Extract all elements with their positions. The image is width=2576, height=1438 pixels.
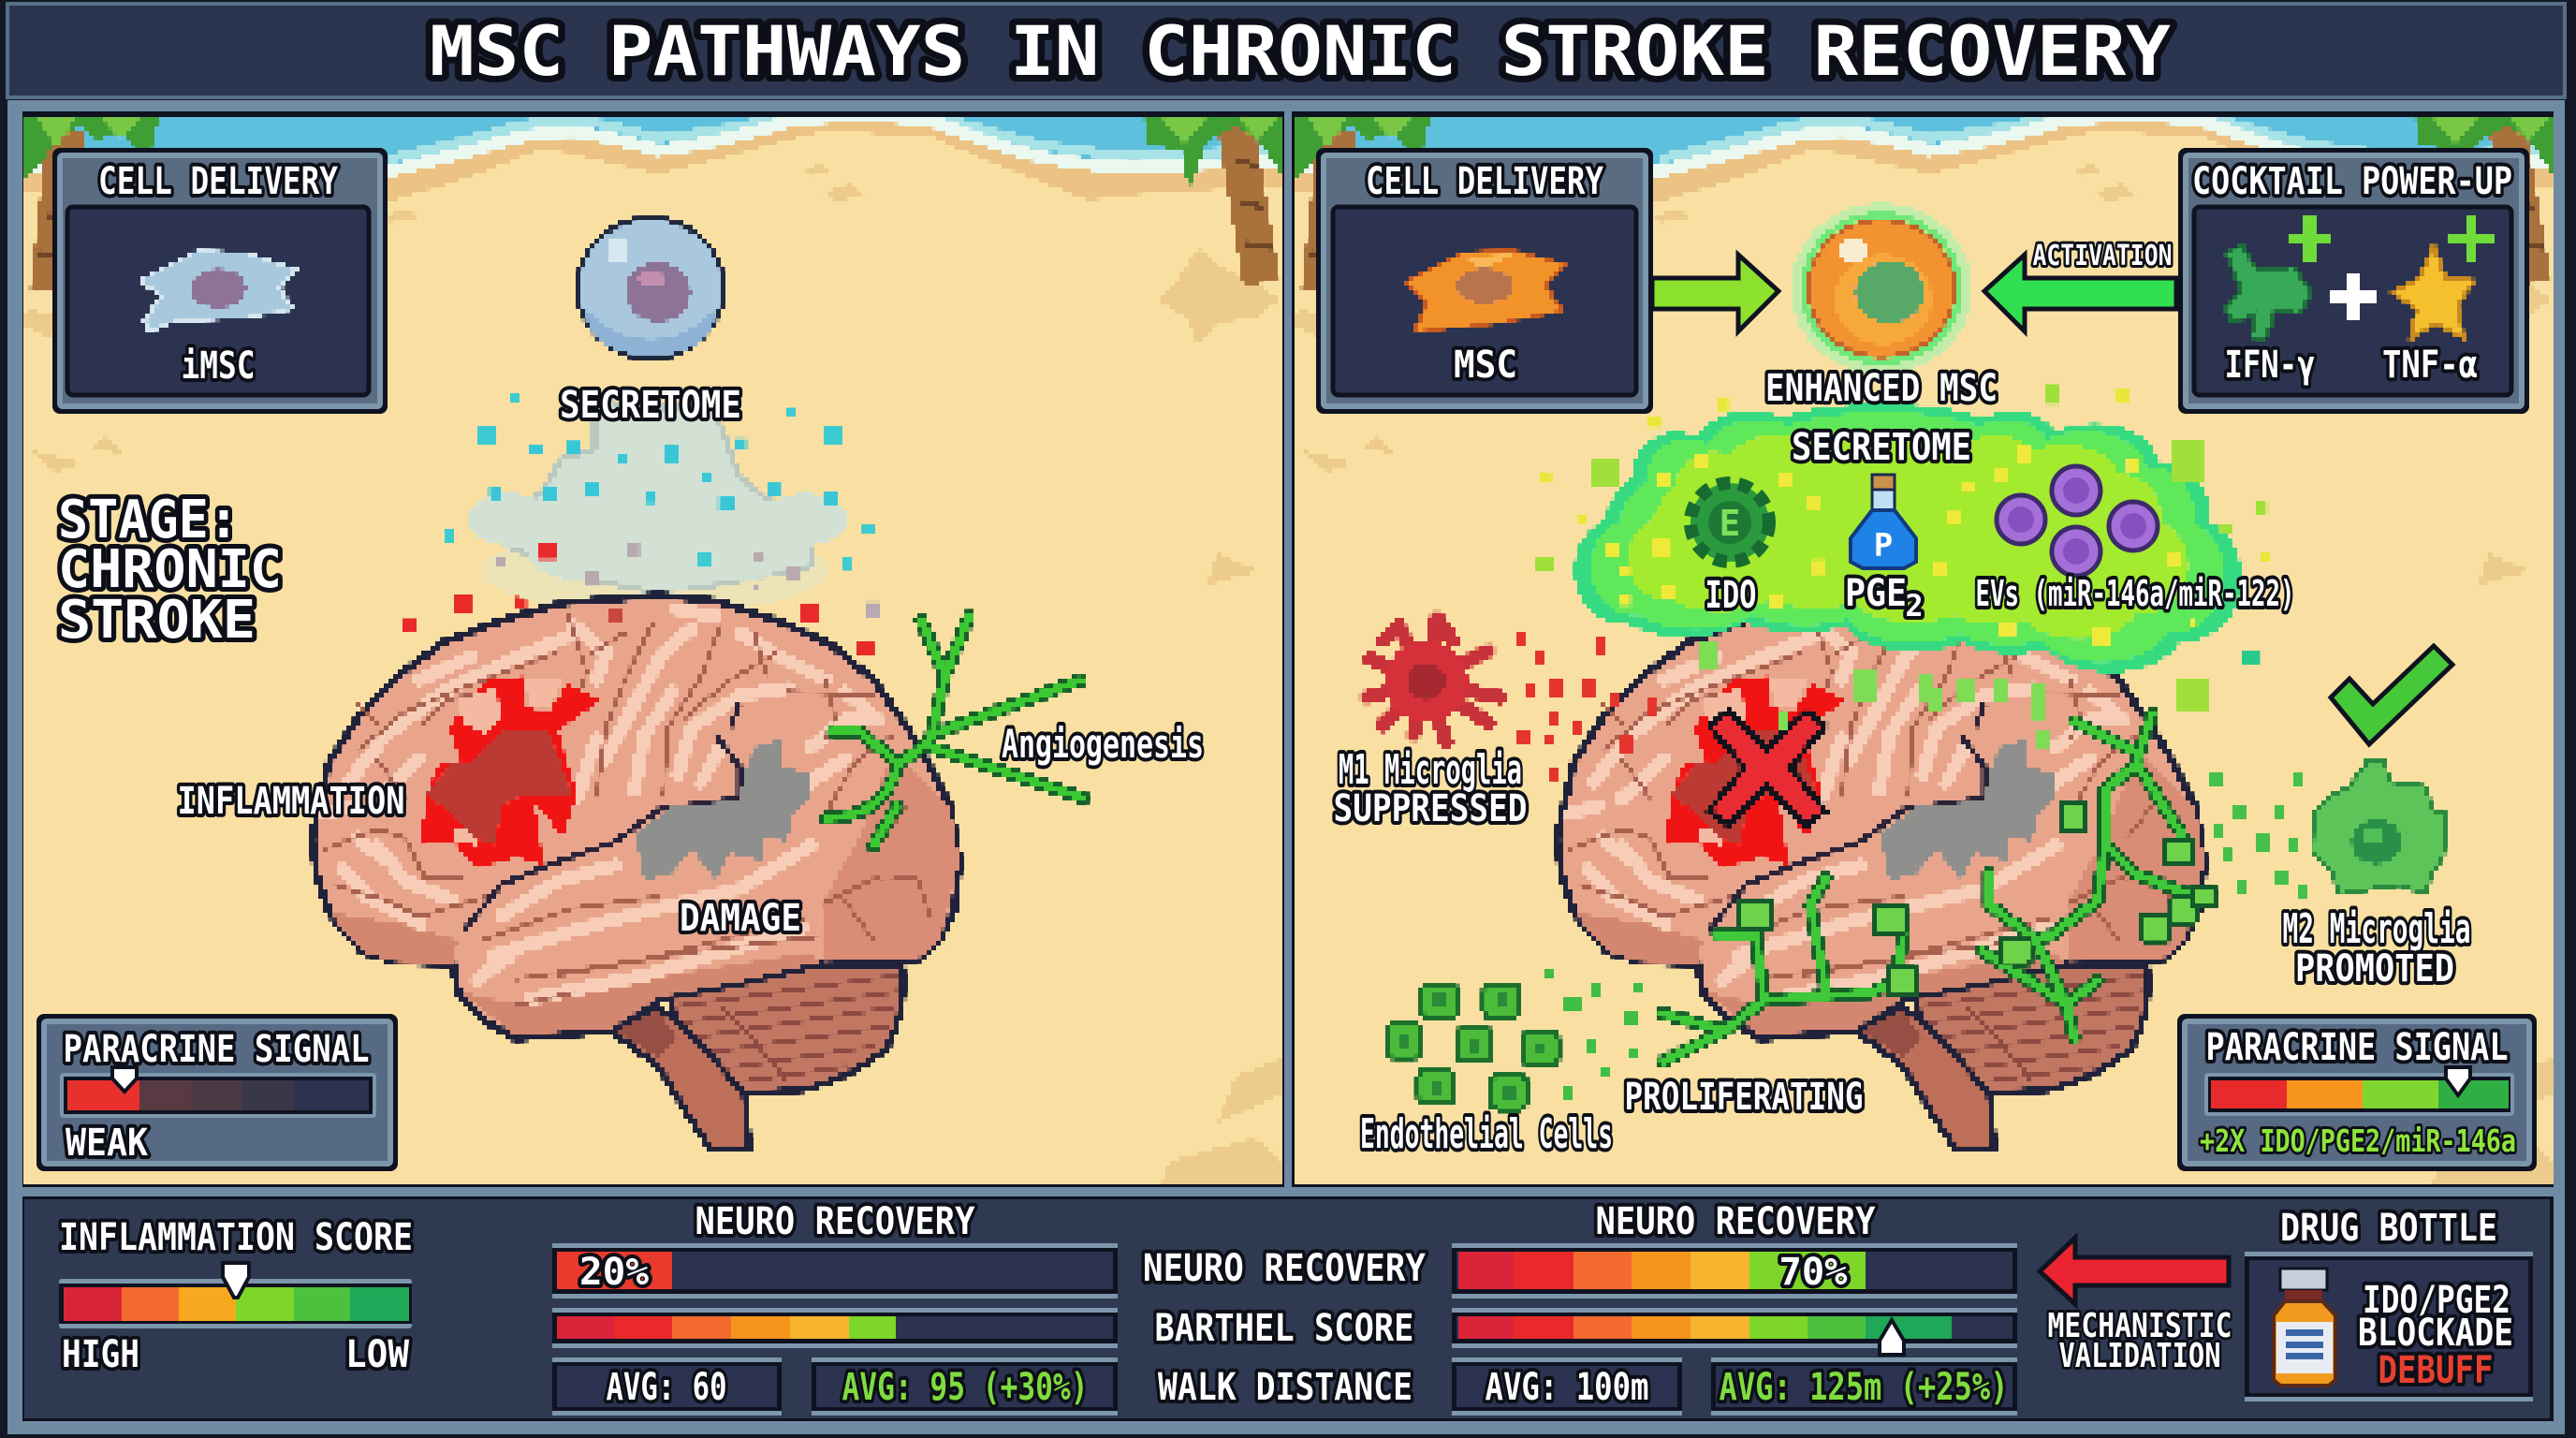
card: paracrine signal enhanced bbox=[2177, 1014, 2537, 1171]
icon: M1 microglia bbox=[1367, 618, 1500, 741]
angiogenesis vessel bbox=[826, 617, 1084, 845]
icon: check mark bbox=[2331, 646, 2452, 744]
marker bbox=[112, 1067, 137, 1092]
center metric labels: WALK DISTANCE bbox=[1158, 1366, 1412, 1409]
card: cell delivery MSC: MSC bbox=[1454, 344, 1517, 387]
marker bbox=[1880, 1320, 1904, 1355]
drug bottle: BLOCKADE bbox=[2358, 1312, 2513, 1355]
label: activation: ACTIVATION bbox=[2033, 240, 2172, 272]
card: paracrine signal weak bbox=[37, 1014, 398, 1171]
drug bottle: DEBUFF bbox=[2378, 1349, 2494, 1392]
card: cocktail power-up bbox=[2178, 148, 2529, 414]
center metric labels bbox=[1143, 1247, 1426, 1409]
particles to brain bbox=[1699, 641, 2050, 749]
card: cell delivery iMSC: iMSC bbox=[182, 345, 255, 388]
label: secretome: SECRETOME bbox=[560, 384, 741, 427]
icon: TNF-alpha bbox=[2393, 217, 2494, 339]
bar: neuro recovery 70%: 70% bbox=[1778, 1251, 1848, 1294]
card: cocktail power-up: TNF-α bbox=[2382, 344, 2478, 387]
label: stage chronic stroke: STROKE bbox=[58, 590, 256, 651]
icon: PGE2 potion: P bbox=[1874, 527, 1893, 565]
arrow: MSC to enhanced MSC bbox=[1652, 255, 1778, 331]
bar: neuro recovery 20% bbox=[552, 1243, 1118, 1299]
particles: M2 bbox=[2209, 772, 2307, 898]
bar: neuro recovery 20%: 20% bbox=[579, 1251, 649, 1294]
icon: bottle bbox=[2274, 1269, 2335, 1386]
icon: iMSC cell bbox=[140, 251, 297, 332]
label: PGE2: PGE bbox=[1845, 572, 1907, 615]
label: endothelial cells: Endothelial Cells bbox=[1360, 1110, 1613, 1158]
damage zone bbox=[1880, 739, 2056, 881]
drug bottle: DRUG BOTTLE bbox=[2280, 1207, 2497, 1250]
arrow: activation bbox=[1984, 255, 2176, 331]
marker bbox=[2446, 1067, 2470, 1095]
label: M1 microglia: M1 Microglia bbox=[1339, 746, 1522, 794]
card: cell delivery MSC bbox=[1316, 148, 1653, 414]
icon: IDO gear bbox=[1690, 483, 1769, 562]
label: secretome enhanced: SECRETOME bbox=[1792, 426, 1971, 469]
green secretome cloud bbox=[1536, 386, 2270, 712]
center metric labels: BARTHEL SCORE bbox=[1155, 1307, 1413, 1350]
bar: neuro recovery 70% bbox=[1452, 1243, 2017, 1299]
panel: enhanced MSC, right bbox=[1290, 116, 2552, 1182]
icon: endothelial cells bbox=[1386, 969, 1645, 1109]
reduced inflammation zone bbox=[1664, 676, 1846, 869]
label: inflammation: INFLAMMATION bbox=[178, 780, 404, 823]
card: cocktail power-up: COCKTAIL POWER-UP bbox=[2192, 160, 2512, 203]
label: angiogenesis: Angiogenesis bbox=[1002, 721, 1204, 767]
card: cell delivery iMSC: CELL DELIVERY bbox=[98, 160, 338, 203]
card: paracrine signal weak: WEAK bbox=[66, 1122, 148, 1165]
label: M2 microglia bbox=[2282, 905, 2471, 990]
icon: PGE2 potion bbox=[1851, 475, 1916, 568]
card: cocktail power-up: IFN-γ bbox=[2224, 344, 2316, 387]
icon: IDO gear: E bbox=[1720, 503, 1740, 544]
bar: barthel score enhanced bbox=[1452, 1308, 2017, 1355]
inflammation score bbox=[59, 1216, 413, 1376]
box: avg 60 bbox=[552, 1357, 782, 1416]
marker bbox=[223, 1263, 249, 1298]
brain right bbox=[1558, 595, 2204, 1149]
drug bottle: IDO/PGE2 bbox=[2363, 1279, 2510, 1322]
label: enhanced MSC: ENHANCED MSC bbox=[1765, 367, 1998, 410]
inflammation zone bbox=[419, 676, 601, 869]
icon: M2 microglia bbox=[2312, 760, 2447, 894]
label: mechanistic validation: MECHANISTIC bbox=[2048, 1307, 2232, 1345]
card: paracrine signal enhanced: PARACRINE SIGNAL bbox=[2205, 1026, 2509, 1069]
icon: large iMSC cell bbox=[578, 218, 724, 359]
icon: MSC cell bbox=[1406, 250, 1566, 331]
panel: bottom stats bbox=[24, 1199, 2550, 1418]
enhanced stats: NEURO RECOVERY bbox=[1595, 1200, 1876, 1243]
center metric labels: NEURO RECOVERY bbox=[1143, 1247, 1426, 1290]
label: mechanistic validation bbox=[2048, 1307, 2232, 1375]
baseline stats: NEURO RECOVERY bbox=[695, 1200, 975, 1243]
drug bottle bbox=[2245, 1207, 2533, 1401]
label: IDO: IDO bbox=[1705, 574, 1756, 617]
label: proliferating: PROLIFERATING bbox=[1625, 1076, 1863, 1119]
box: avg 60: AVG: 60 bbox=[607, 1366, 726, 1409]
title bar bbox=[7, 4, 2565, 97]
label: damage: DAMAGE bbox=[680, 897, 801, 940]
box: avg 95: AVG: 95 (+30%) bbox=[842, 1366, 1088, 1409]
label: M1 microglia bbox=[1333, 746, 1528, 830]
label: PGE2: 2 bbox=[1905, 588, 1924, 624]
damage zone bbox=[635, 739, 812, 881]
brain left bbox=[313, 595, 959, 1149]
icon: plus bbox=[2330, 273, 2377, 320]
faint secretome cloud bbox=[403, 392, 880, 655]
label: EVs: EVs (miR-146a/miR-122) bbox=[1975, 573, 2295, 614]
inflammation score: LOW bbox=[345, 1333, 410, 1376]
label: stage chronic stroke: STAGE: bbox=[58, 490, 239, 550]
icon: enhanced MSC bbox=[1791, 203, 1972, 374]
beach background right bbox=[1290, 116, 2552, 1182]
beach background left bbox=[19, 116, 1281, 1182]
label: stage chronic stroke bbox=[58, 490, 282, 651]
card: cell delivery iMSC bbox=[52, 148, 388, 414]
red X over inflammation bbox=[1709, 712, 1825, 825]
inflammation score: HIGH bbox=[62, 1333, 139, 1376]
enhanced stats bbox=[1452, 1200, 2017, 1416]
label: mechanistic validation: VALIDATION bbox=[2059, 1337, 2220, 1375]
label: M2 microglia: M2 Microglia bbox=[2282, 905, 2471, 953]
vessels on brain bbox=[1662, 713, 2215, 1062]
label: M2 microglia: PROMOTED bbox=[2295, 947, 2454, 990]
baseline stats bbox=[552, 1200, 1118, 1416]
box: avg 125m: AVG: 125m (+25%) bbox=[1719, 1366, 2009, 1409]
box: avg 95 bbox=[812, 1357, 1118, 1416]
box: avg 125m bbox=[1711, 1357, 2017, 1416]
bar: barthel score baseline bbox=[552, 1308, 1118, 1348]
icon: IFN-gamma bbox=[2226, 217, 2333, 339]
card: paracrine signal weak: PARACRINE SIGNAL bbox=[64, 1028, 369, 1071]
card: cell delivery MSC: CELL DELIVERY bbox=[1366, 160, 1603, 203]
box: avg 100m bbox=[1452, 1357, 1682, 1416]
label: M1 microglia: SUPPRESSED bbox=[1333, 787, 1528, 830]
inflammation score: INFLAMMATION SCORE bbox=[59, 1216, 413, 1259]
particles: M1 bbox=[1516, 632, 1657, 781]
label: stage chronic stroke: CHRONIC bbox=[58, 539, 282, 600]
box: avg 100m: AVG: 100m bbox=[1485, 1366, 1649, 1409]
panel: iMSC baseline, left bbox=[19, 116, 1281, 1182]
icon: EV vesicles bbox=[1997, 466, 2158, 576]
arrow: mechanistic validation bbox=[2040, 1238, 2229, 1304]
title: MSC PATHWAYS IN CHRONIC STROKE RECOVERY bbox=[430, 12, 2171, 92]
